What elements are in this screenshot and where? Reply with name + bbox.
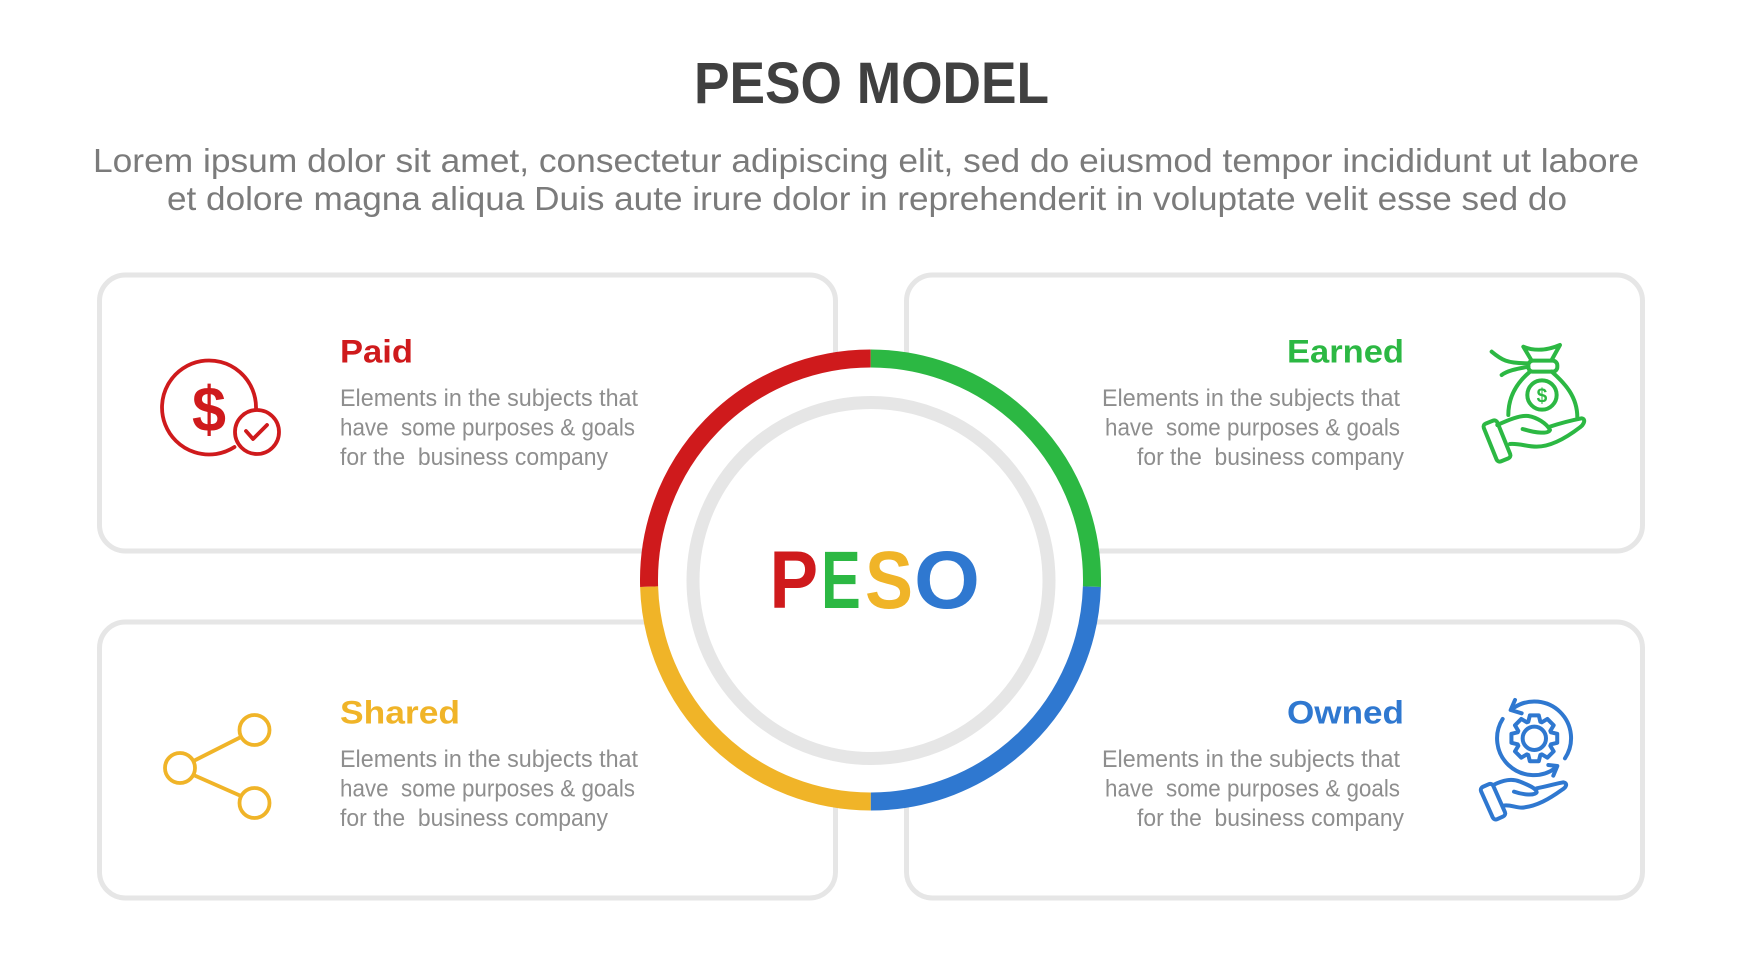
ring segment: paid [649, 358, 871, 587]
description: owned: have some purposes & goals [1105, 776, 1400, 802]
icon: dollar coin with check [162, 361, 279, 455]
subtitle text block [93, 142, 1639, 217]
icon: money bag on hand: $ [1537, 384, 1548, 407]
heading: earned: Earned [1287, 334, 1404, 370]
subtitle text block: Lorem ipsum dolor sit amet, consectetur adipiscing elit, sed do eiusmod tempor incididunt ut labore [93, 142, 1639, 179]
icon: share nodes [165, 715, 270, 818]
center label: PESO: P [770, 535, 818, 626]
ring segment: earned [871, 358, 1092, 587]
inner grey ring [693, 402, 1049, 758]
description: owned: Elements in the subjects that [1102, 746, 1400, 773]
icon: dollar coin with check: $ [192, 373, 226, 445]
icon: money bag on hand [1483, 345, 1584, 463]
description: shared [340, 746, 638, 832]
description: owned: for the business company [1137, 805, 1404, 832]
description: shared: have some purposes & goals [340, 776, 635, 802]
description: shared: Elements in the subjects that [340, 746, 638, 773]
ring segment: owned [871, 587, 1092, 802]
title: PESO MODEL [694, 51, 1049, 116]
panel: owned [906, 622, 1642, 898]
description: paid [340, 385, 638, 471]
description: earned [1102, 385, 1404, 471]
central ring chart [640, 350, 1100, 810]
panel: shared [100, 622, 836, 898]
panel: earned [906, 275, 1642, 551]
description: earned: Elements in the subjects that [1102, 385, 1400, 412]
icon: gear on hand [1480, 700, 1571, 821]
description: earned: have some purposes & goals [1105, 414, 1400, 442]
heading: shared: Shared [340, 694, 460, 730]
ring segment: shared [649, 587, 871, 802]
heading: paid: Paid [340, 334, 413, 370]
description: paid: Elements in the subjects that [340, 385, 638, 412]
description: shared: for the business company [340, 805, 608, 832]
heading: owned: Owned [1287, 694, 1404, 730]
center label: PESO [770, 535, 980, 626]
subtitle text block: et dolore magna aliqua Duis aute irure dolor in reprehenderit in voluptate velit esse sed do [167, 180, 1567, 217]
description: paid: for the business company [340, 444, 608, 471]
center label: PESO: O [914, 535, 980, 626]
center label: PESO: S [865, 535, 913, 626]
description: earned: for the business company [1137, 444, 1404, 471]
description: paid: have some purposes & goals [340, 414, 635, 442]
panel: paid [100, 275, 836, 551]
center label: PESO: E [821, 535, 861, 626]
description: owned [1102, 746, 1404, 832]
